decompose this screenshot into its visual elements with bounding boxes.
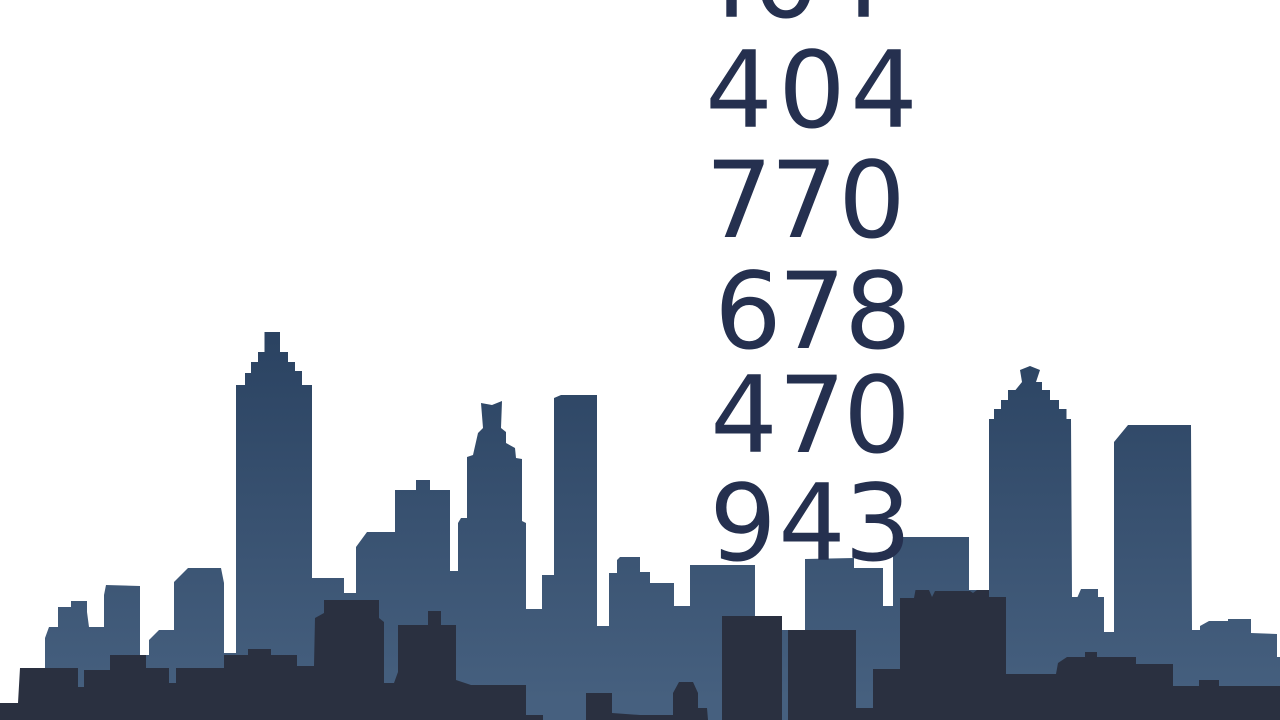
area code numbers <box>686 0 918 585</box>
dark buildings, low centre group <box>586 682 708 720</box>
foreground skyline: dark buildings <box>0 590 1280 720</box>
background skyline: blue buildings <box>45 332 1280 720</box>
dark tower, centre <box>722 616 782 720</box>
area code 678: 678 <box>714 250 912 373</box>
area code 943: 943 <box>709 462 912 585</box>
dark buildings, left group <box>0 600 543 720</box>
dark buildings, right group <box>788 590 1280 720</box>
area code 770: 770 <box>705 139 906 262</box>
area code 404: 404 <box>705 29 918 152</box>
area code 470: 470 <box>710 354 911 477</box>
